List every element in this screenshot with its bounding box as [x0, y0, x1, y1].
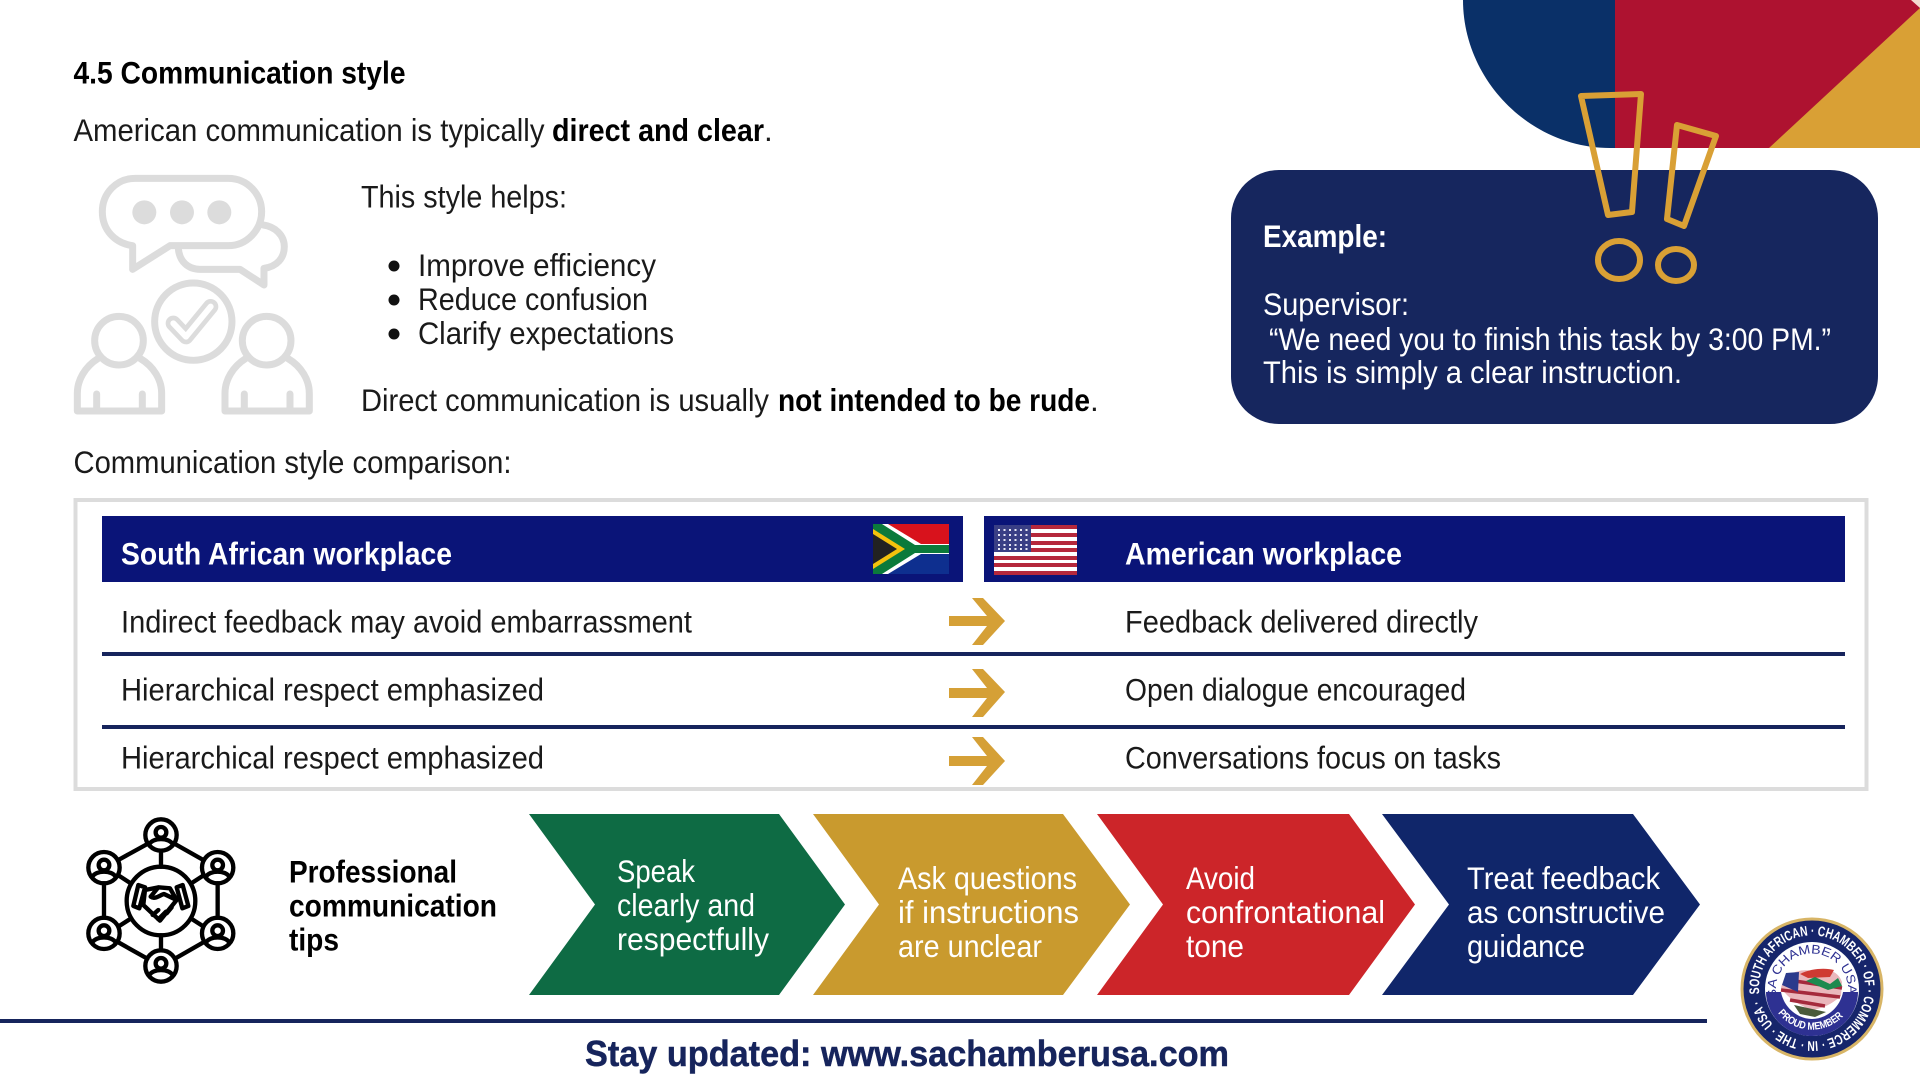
callout: example panel: Example: [1263, 218, 1387, 254]
text block: professional communication tips: tips [289, 922, 339, 958]
arrow: row 3 [949, 737, 1005, 785]
chevron: avoid confrontational tone [1097, 814, 1415, 995]
row 3: Conversations focus on tasks [1125, 740, 1501, 776]
text block: this style helps: not intended to be rude [778, 382, 1090, 418]
heading: comparison label: Communication style comparison: [74, 444, 512, 480]
logo: SA Chamber USA seal: PROUD MEMBER [1778, 1008, 1844, 1030]
text block: intro sentence: . [764, 112, 773, 148]
row 2 [121, 672, 1466, 708]
row 2: Hierarchical respect emphasized [121, 672, 544, 708]
chevron: speak clearly: respectfully [617, 921, 769, 957]
chevron: avoid confrontational tone: Avoid [1186, 860, 1255, 896]
row 1: Indirect feedback may avoid embarrassment [121, 604, 692, 640]
text block: professional communication tips: Professional [289, 854, 457, 890]
logo: SA Chamber USA seal: SOUTH AFRICAN · CHAMBER · OF · COMMERCE · IN · THE · USA · [1749, 926, 1875, 1051]
icon: gold exclamation marks [1581, 94, 1716, 281]
chevron: speak clearly: clearly and [617, 887, 755, 923]
row 2: Open dialogue encouraged [1125, 672, 1466, 708]
text block: this style helps: Direct communication is usually [361, 382, 769, 418]
callout: example panel: This is simply a clear instruction. [1263, 354, 1682, 390]
heading: section title: 4.5 Communication style [74, 54, 406, 90]
text block: this style helps: . [1090, 382, 1099, 418]
row 3: Hierarchical respect emphasized [121, 740, 544, 776]
chevron: treat feedback: as constructive [1467, 894, 1665, 930]
chevron: treat feedback [1382, 814, 1700, 995]
header: American workplace: American workplace [1125, 536, 1402, 572]
footer: website call to action: Stay updated: www.sachamberusa.com [585, 1033, 1229, 1074]
text block: intro sentence: direct and clear [552, 112, 764, 148]
chevron: avoid confrontational tone: confrontational [1186, 894, 1385, 930]
row 1 [121, 604, 1478, 640]
corner decoration: blue, red and gold shapes [1463, 0, 1920, 148]
callout: example panel [1231, 170, 1878, 424]
comparison table [76, 500, 1866, 789]
icon: South African flag [873, 524, 949, 574]
text block: this style helps: Reduce confusion [418, 281, 648, 317]
chevron: speak clearly [529, 814, 845, 995]
header: South African workplace [102, 516, 963, 582]
text block: this style helps: This style helps: [361, 178, 567, 214]
chevron: treat feedback: Treat feedback [1467, 860, 1660, 896]
row 3 [121, 740, 1501, 776]
logo: SA Chamber USA seal: SA CHAMBER USA [1768, 944, 1857, 992]
text block: this style helps [361, 178, 1099, 418]
seal flag artwork [1781, 969, 1842, 1017]
arrow: row 2 [949, 669, 1005, 717]
chevron: ask questions: are unclear [898, 928, 1042, 964]
text block: professional communication tips: communication [289, 888, 497, 924]
text block: intro sentence: American communication is typically [74, 112, 545, 148]
chevron: ask questions: if instructions [898, 894, 1079, 930]
chevron: ask questions: Ask questions [898, 860, 1077, 896]
callout: example panel: Supervisor: [1263, 286, 1409, 322]
row 1: Feedback delivered directly [1125, 604, 1478, 640]
header: American workplace [984, 516, 1845, 582]
text block: this style helps: Clarify expectations [418, 315, 674, 351]
chevron: speak clearly: Speak [617, 853, 695, 889]
icon: American flag [994, 525, 1077, 575]
icon: two people with speech bubbles and check mark [77, 178, 309, 411]
header: South African workplace: South African workplace [121, 536, 452, 572]
chevron: avoid confrontational tone: tone [1186, 928, 1244, 964]
icon: network with handshake [88, 819, 233, 982]
chevron: ask questions [813, 814, 1130, 995]
text block: professional communication tips [289, 854, 497, 958]
arrow: row 1 [949, 598, 1005, 645]
chevron: treat feedback: guidance [1467, 928, 1585, 964]
callout: example panel: “We need you to finish this task by 3:00 PM.” [1269, 321, 1831, 357]
text block: this style helps: Improve efficiency [418, 247, 656, 283]
